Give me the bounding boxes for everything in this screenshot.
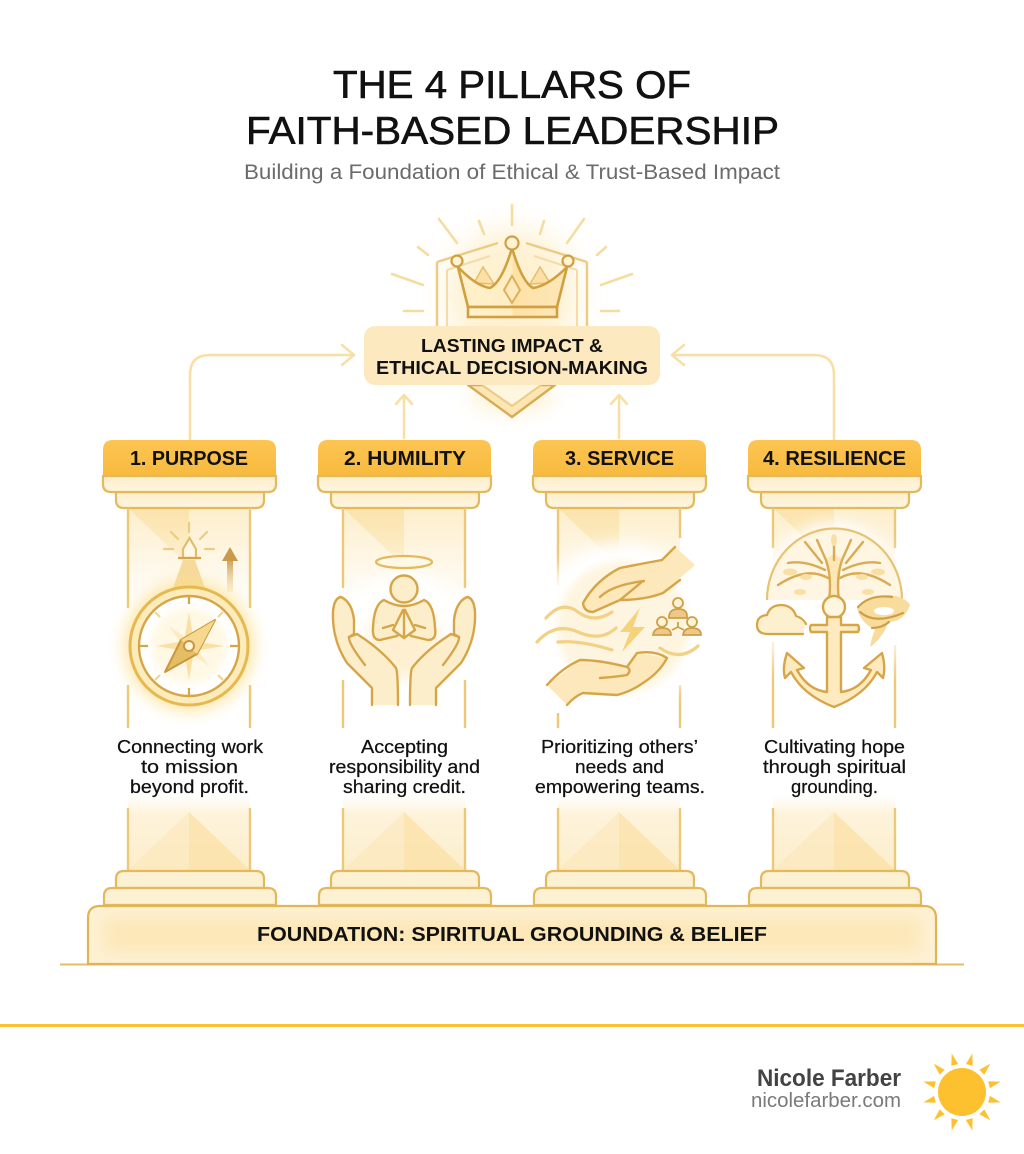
icon: tree, anchor, cloud and storm [757,522,910,707]
tree [778,534,890,600]
right hand [410,597,475,705]
description: beyond profit. [130,777,249,797]
icon: sun [922,1052,1002,1132]
description: Connecting work [117,737,264,757]
heading: 4. RESILIENCE [763,448,906,470]
icon: crown and shield [392,205,632,417]
description: Accepting [361,737,448,757]
pillar 3: service [533,440,708,905]
footer divider [0,1024,1024,1027]
description: through spiritual [763,757,906,777]
description [117,737,264,797]
subtitle: Building a Foundation of Ethical & Trust-Based Impact [244,161,780,184]
foundation [60,906,964,964]
figure [373,576,435,640]
description: sharing credit. [343,777,466,797]
icon: praying figure held in open hands [333,556,475,705]
description: empowering teams. [535,777,705,797]
heading: 2. HUMILITY [344,448,467,470]
description: to mission [141,757,238,777]
pillar 4: resilience [748,440,921,905]
footer brand [751,1052,1002,1132]
sun rays [392,205,632,311]
author name: Nicole Farber [757,1065,901,1092]
title: FAITH-BASED LEADERSHIP [246,110,779,153]
description: responsibility and [329,757,480,777]
icon: up arrow [222,547,238,592]
storm [857,595,910,647]
website: nicolefarber.com [751,1090,901,1112]
heading: 3. SERVICE [565,448,674,470]
team [653,598,701,635]
pillar 2: humility [318,440,491,905]
crown [452,236,574,317]
icon: giving hands, energy and team [536,543,708,707]
shield [437,243,587,417]
description: needs and [575,757,664,777]
description [535,737,705,797]
description: grounding. [791,777,878,797]
description: Prioritizing others’ [541,737,698,757]
arrows into the lasting impact box [190,345,834,440]
title [246,64,779,153]
description [329,737,480,797]
cloud [757,605,806,634]
pillar 1: purpose [103,440,276,905]
heading: 1. PURPOSE [130,448,248,470]
callout: lasting impact [364,326,660,385]
callout: lasting impact: ETHICAL DECISION-MAKING [376,358,648,378]
lower hand [547,653,667,705]
halo [376,556,432,568]
left hand [333,597,398,705]
icon: compass [124,581,254,711]
upper hand [583,547,695,612]
anchor [784,596,884,707]
description [763,737,906,797]
icon: lighthouse [164,523,214,588]
callout: lasting impact: LASTING IMPACT & [421,336,603,356]
foundation label: FOUNDATION: SPIRITUAL GROUNDING & BELIEF [257,924,767,946]
lightning bolt [620,608,645,652]
wind [537,607,698,655]
title: THE 4 PILLARS OF [333,64,691,107]
description: Cultivating hope [764,737,905,757]
